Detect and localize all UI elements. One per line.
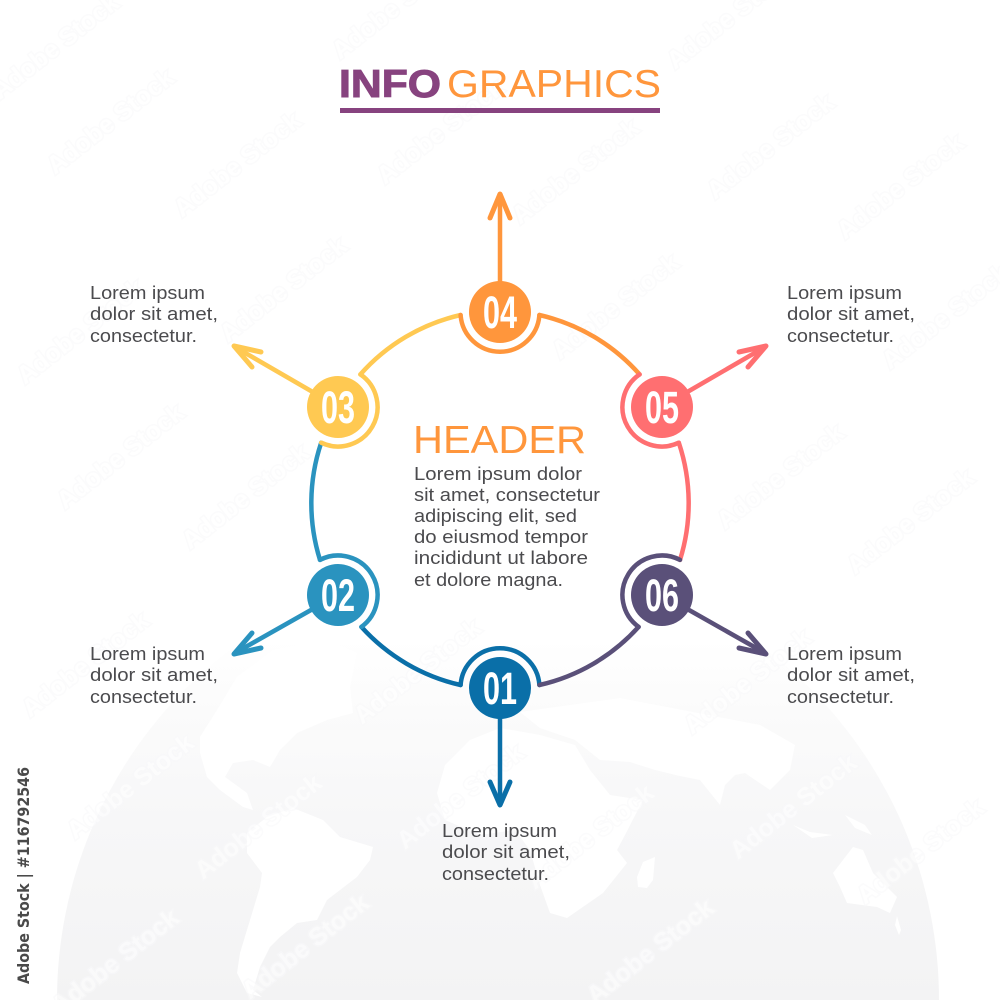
label: node 02: Lorem ipsum (90, 643, 205, 664)
title: GRAPHICS (447, 63, 661, 106)
label: node 05 (787, 282, 915, 346)
label: node 01: dolor sit amet, (442, 841, 570, 862)
title (339, 63, 661, 113)
node 06 (539, 556, 766, 685)
node 06: 06 (645, 570, 679, 621)
label: node 06: Lorem ipsum (787, 643, 902, 664)
center text block: et dolore magna. (414, 569, 563, 590)
label: node 05: Lorem ipsum (787, 282, 902, 303)
watermark: Adobe Stock (506, 114, 644, 230)
watermark: Adobe Stock (214, 232, 352, 348)
center text block: sit amet, consectetur (414, 484, 600, 505)
label: node 02 (90, 643, 218, 707)
watermark: Adobe Stock (348, 614, 486, 730)
node 03 (234, 315, 461, 446)
title: INFO (339, 63, 441, 106)
watermark: Adobe Stock (678, 624, 816, 740)
watermark: Adobe Stock (701, 89, 839, 205)
watermark: Adobe Stock (391, 739, 529, 855)
label: node 01: consectetur. (442, 863, 549, 884)
watermark: Adobe Stock (11, 274, 149, 390)
node 03: 03 (321, 382, 355, 433)
watermark: Adobe Stock (176, 439, 314, 555)
watermark: Adobe Stock (831, 129, 969, 245)
watermark: Adobe Stock (724, 749, 862, 865)
node 04: 04 (483, 287, 517, 338)
node 02 (234, 443, 378, 654)
watermark: Adobe Stock (521, 779, 659, 895)
node 01 (361, 627, 539, 805)
watermark: Adobe Stock (61, 729, 199, 845)
label: node 01 (442, 820, 570, 884)
globe background with continents (57, 559, 939, 1000)
center text block (413, 419, 600, 590)
watermark: Adobe Stock (168, 107, 306, 223)
label: node 03: dolor sit amet, (90, 303, 218, 324)
label: node 06 (787, 643, 915, 707)
node 01: 01 (483, 663, 517, 714)
watermark: Adobe Stock (711, 419, 849, 535)
watermark: Adobe Stock (851, 794, 989, 910)
label: node 02: dolor sit amet, (90, 664, 218, 685)
label: node 06: dolor sit amet, (787, 664, 915, 685)
label: node 03 (90, 282, 218, 346)
watermark: Adobe Stock (189, 769, 327, 885)
label: node 03: consectetur. (90, 325, 197, 346)
center text block: incididunt ut labore (414, 547, 588, 568)
center text block: HEADER (413, 419, 586, 462)
center text block: adipiscing elit, sed (414, 505, 577, 526)
node 04 (461, 194, 640, 374)
label: node 06: consectetur. (787, 686, 894, 707)
watermark: Adobe Stock (51, 399, 189, 515)
center text block: do eiusmod tempor (414, 526, 588, 547)
label: node 03: Lorem ipsum (90, 282, 205, 303)
label: node 05: dolor sit amet, (787, 303, 915, 324)
stock credit: Adobe Stock | #116792546 (14, 767, 34, 984)
label: node 02: consectetur. (90, 686, 197, 707)
watermark: Adobe Stock (16, 607, 154, 723)
node 05: 05 (645, 382, 679, 433)
watermark: Adobe Stock (41, 64, 179, 180)
center text block: Lorem ipsum dolor (414, 463, 582, 484)
label: node 05: consectetur. (787, 325, 894, 346)
watermark: Adobe Stock (841, 464, 979, 580)
watermark: Adobe Stock (371, 74, 509, 190)
label: node 01: Lorem ipsum (442, 820, 557, 841)
watermark: Adobe Stock (546, 249, 684, 365)
node 02: 02 (321, 570, 355, 621)
node 05 (622, 346, 766, 560)
